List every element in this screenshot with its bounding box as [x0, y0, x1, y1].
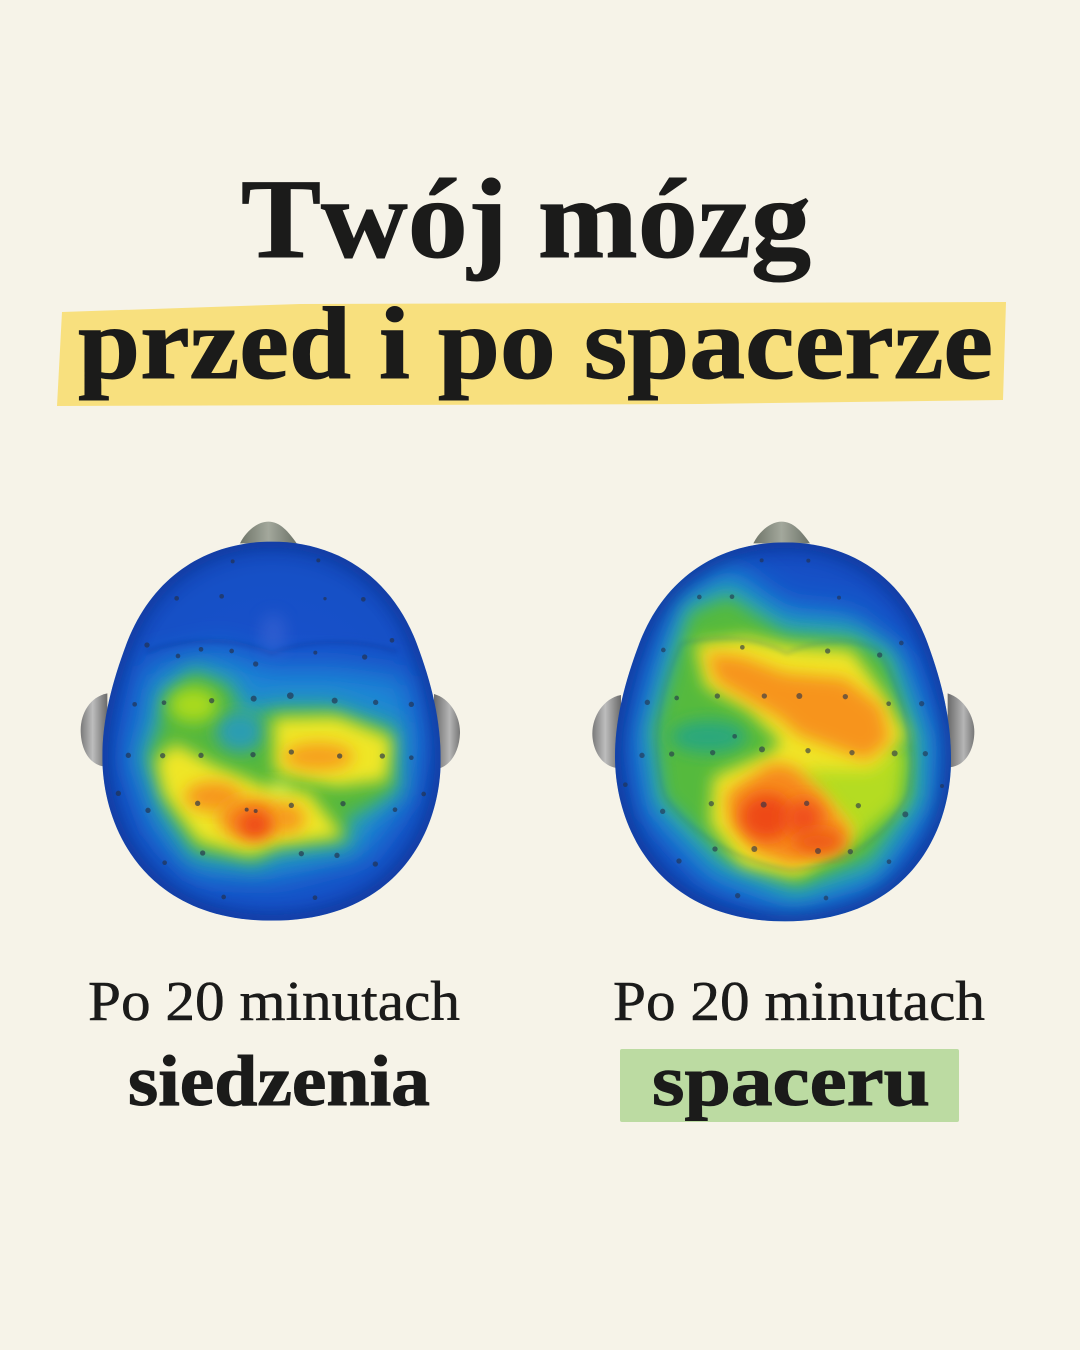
skull with activity map — [615, 542, 951, 922]
skull with activity map — [102, 542, 441, 921]
heatmap: head after walking — [592, 522, 974, 930]
caption line: Po 20 minutach — [613, 971, 985, 1033]
green highlight — [620, 1049, 959, 1122]
title line 2 with yellow highlight: przed i po spacerze — [78, 287, 993, 401]
caption line: Po 20 minutach — [88, 971, 460, 1033]
ears and nose — [592, 522, 974, 768]
caption: after sitting — [88, 971, 460, 1121]
electrode dots — [116, 558, 426, 900]
title line 1: Twój mózg — [241, 157, 811, 282]
caption keyword: spaceru — [652, 1041, 930, 1121]
caption: after walking — [613, 971, 985, 1122]
ears and nose — [81, 522, 460, 769]
heatmap: head after sitting — [81, 522, 460, 930]
title — [57, 157, 1006, 406]
caption keyword: siedzenia — [128, 1041, 430, 1121]
electrode dots — [623, 558, 944, 900]
